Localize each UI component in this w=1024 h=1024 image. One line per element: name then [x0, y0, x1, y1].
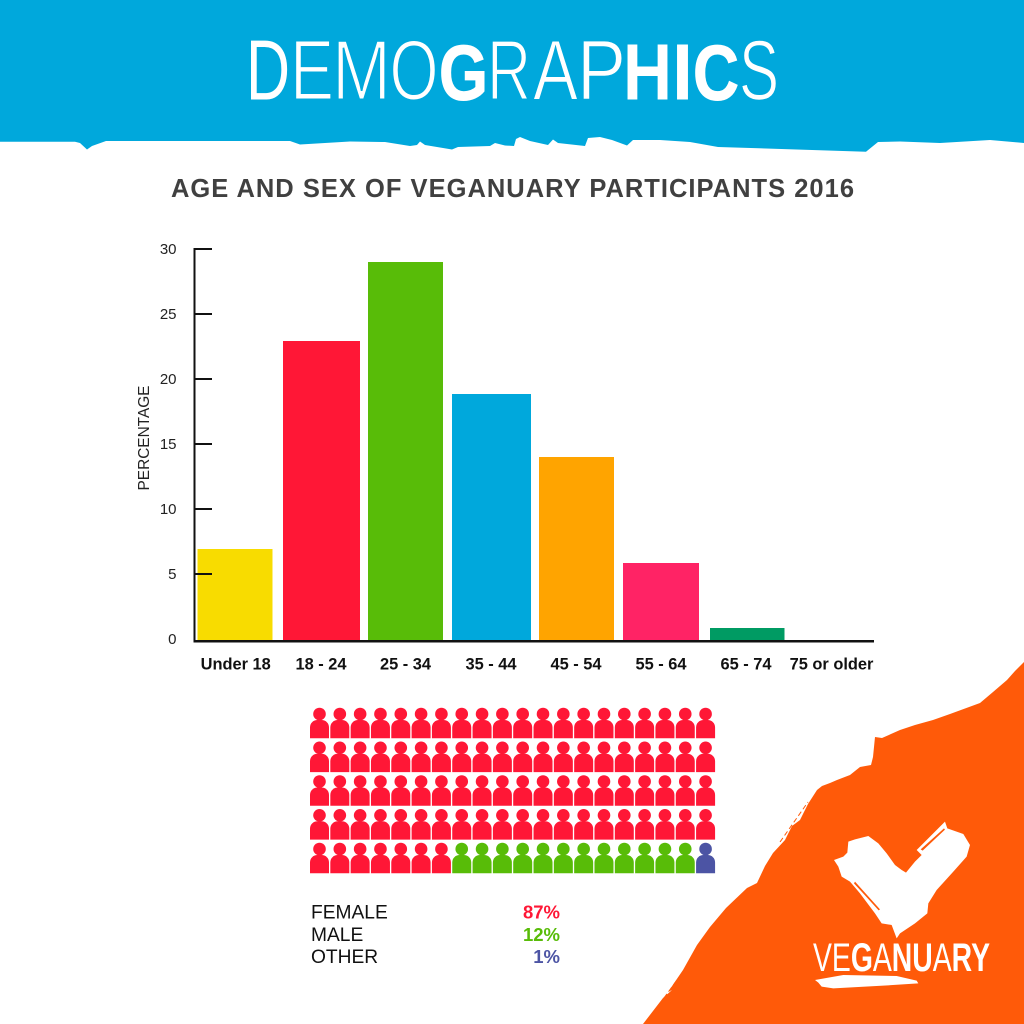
legend: male: 12%	[523, 924, 560, 945]
title: D	[246, 24, 290, 118]
legend: female: FEMALE	[311, 902, 388, 924]
legend: other	[311, 946, 560, 968]
veganuary logo	[813, 822, 990, 988]
x axis labels: 65 - 74	[720, 655, 772, 673]
icon: heart	[834, 822, 970, 938]
y axis labels: 15	[160, 436, 176, 453]
x axis labels: 35 - 44	[465, 655, 517, 673]
y axis labels: 30	[160, 241, 176, 258]
wordmark: VEGANUARY	[813, 936, 990, 980]
x axis labels: Under 18	[201, 655, 271, 673]
bar chart	[136, 241, 874, 673]
y axis labels: 20	[160, 371, 176, 388]
brush flecks on the edge	[664, 802, 808, 998]
bar: 25 - 34	[368, 262, 443, 640]
title: R	[487, 24, 531, 118]
title: C	[693, 28, 739, 116]
axes	[194, 248, 212, 642]
bar: 65 - 74	[710, 628, 784, 640]
x axis labels: 55 - 64	[635, 655, 687, 673]
legend: male	[311, 924, 560, 946]
legend: female: 87%	[523, 902, 560, 922]
x axis labels: 45 - 54	[550, 655, 602, 673]
header banner	[0, 0, 1024, 152]
title: H	[623, 28, 672, 116]
orange corner shape	[643, 662, 1024, 1024]
y axis labels	[160, 241, 176, 648]
title: A	[533, 24, 578, 118]
legend: female	[311, 902, 560, 924]
legend: male: MALE	[311, 925, 363, 946]
brush underline	[815, 975, 918, 988]
bar: 45 - 54	[539, 457, 614, 640]
title: E	[290, 24, 334, 118]
y axis labels: 10	[160, 501, 176, 518]
bar: 35 - 44	[452, 394, 531, 640]
x axis labels: 18 - 24	[295, 655, 347, 673]
legend: other: OTHER	[311, 947, 378, 968]
title: I	[672, 28, 693, 116]
subtitle: AGE AND SEX OF VEGANUARY PARTICIPANTS 2016	[171, 175, 854, 203]
title: O	[390, 24, 438, 118]
bar: 55 - 64	[623, 563, 699, 640]
pictogram: sex of participants	[310, 708, 715, 873]
y axis labels: 5	[168, 566, 176, 583]
bar: Under 18	[198, 549, 272, 640]
y axis title: PERCENTAGE	[136, 386, 153, 490]
title: S	[739, 24, 779, 118]
x axis labels: 75 or older	[790, 655, 874, 673]
bar: 18 - 24	[283, 341, 360, 640]
y axis labels: 0	[168, 631, 176, 648]
legend: other: 1%	[533, 946, 560, 967]
x axis labels	[201, 655, 874, 673]
other icon	[696, 843, 715, 873]
title: G	[439, 28, 488, 116]
y axis labels: 25	[160, 306, 176, 323]
male icons	[452, 843, 695, 873]
x axis labels: 25 - 34	[380, 655, 432, 673]
female rows	[310, 708, 715, 873]
title: M	[332, 24, 391, 118]
title: P	[577, 24, 626, 118]
legend	[311, 902, 560, 968]
